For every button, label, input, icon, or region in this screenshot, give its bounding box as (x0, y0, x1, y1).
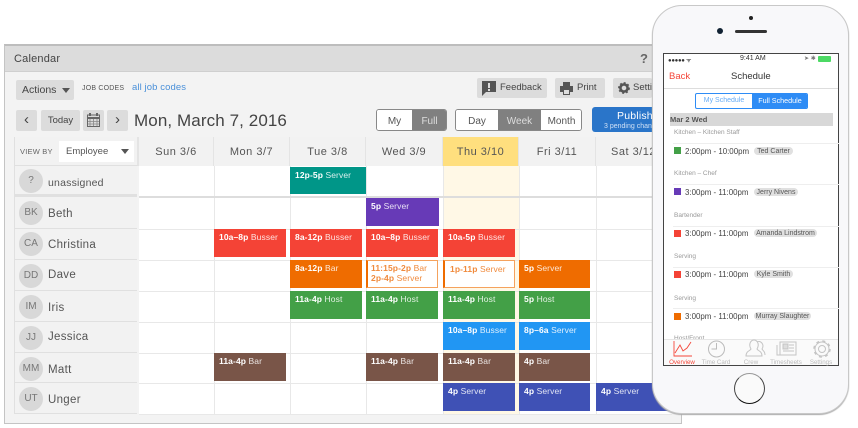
phone screen content: Timesheets (770, 359, 802, 366)
toggle option: week: Week (507, 116, 532, 127)
tab bar (664, 339, 838, 365)
shift: Fri Dave (519, 260, 590, 288)
shift: Fri Unger: 4p Server (524, 386, 562, 396)
header: Wednesday: Wed 3/9 (382, 146, 426, 158)
phone screen content: Kitchen – Chef (674, 170, 717, 176)
job codes label: JOB CODES (82, 85, 124, 92)
icon: printer (560, 82, 573, 95)
row: Matt label: MM (23, 363, 39, 374)
shift: Wed Dave pending: 2p-4p Server (371, 273, 422, 283)
publish button: Publish (617, 110, 653, 122)
phone screen content: Crew (744, 359, 758, 366)
phone screen content: Overview (669, 359, 695, 366)
phone screen content: 3:00pm - 11:00pm (685, 228, 748, 238)
shift: Thu Dave pending: 1p-11p Server (450, 264, 506, 274)
clipped category: Host/Front (674, 335, 704, 342)
next button (107, 110, 128, 131)
today button: Today (48, 115, 73, 126)
shift: Fri Dave: 5p Server (524, 263, 562, 273)
shift: Wed Beth (366, 198, 439, 226)
shift: Sat Unger (596, 383, 672, 411)
icon: calendar (87, 113, 100, 127)
phone screen content: 3:00pm - 11:00pm (685, 312, 748, 320)
toggle option: full: Full (421, 116, 438, 127)
shift: Thu Unger: 4p Server (448, 386, 486, 396)
screen title: Schedule (731, 71, 771, 82)
shift: Fri Matt (519, 353, 590, 381)
shift: Wed Dave pending: 11:15p-2p Bar (371, 263, 427, 273)
status bar: 9:41 AM (740, 55, 766, 62)
row: Matt label (14, 353, 137, 383)
row: Iris label (14, 291, 137, 322)
tab labels (669, 359, 832, 366)
icon: crew (746, 340, 765, 356)
shift: Wed Beth: 5p Server (371, 201, 409, 211)
row: Dave label: Dave (48, 269, 76, 281)
today button (41, 110, 80, 131)
schedule entry 2 (673, 170, 839, 196)
publish button: 3 pending changes (604, 123, 662, 130)
toggle: day, week, month (455, 109, 582, 131)
phone screen content: Ted Carter (757, 148, 790, 155)
row: Iris label: IM (25, 301, 37, 312)
previous button: ‹ (24, 111, 29, 128)
row: Christina label (14, 229, 137, 260)
shift: Mon Christina: 10a–8p Busser (219, 232, 278, 242)
row: Dave label: DD (24, 270, 38, 281)
row: Jessica label: Jessica (48, 331, 88, 343)
row: Christina label: CA (24, 238, 38, 249)
shift: Tue Iris: 11a-4p Host (295, 294, 342, 304)
shift: Tue Dave (290, 260, 362, 288)
actions button (16, 80, 74, 100)
row: Beth label: BK (24, 207, 38, 218)
header: Thursday (today) (443, 137, 519, 166)
shift: Wed Christina (366, 229, 438, 257)
phone (652, 5, 849, 414)
header: Tuesday: Tue 3/8 (307, 146, 348, 158)
toggle option: full (412, 110, 447, 131)
shift: Thu Matt (443, 353, 515, 381)
employee dropdown (59, 141, 134, 162)
shift: Thu Jessica (443, 322, 515, 350)
row: Christina label: Christina (48, 239, 96, 251)
view by control: VIEW BY (20, 147, 53, 156)
view by control (14, 137, 139, 166)
schedule toggle (695, 93, 808, 109)
phone screen (663, 53, 839, 366)
shift: Wed Matt: 11a-4p Bar (371, 356, 414, 366)
status bar: ●●●●● ᯤ (668, 58, 691, 64)
phone screen content: Serving (674, 252, 696, 260)
icon: clock (708, 341, 724, 357)
date band (670, 113, 833, 126)
row: Dave label (14, 260, 137, 291)
toggle: my schedule: My Schedule (704, 97, 744, 104)
header: Monday: Mon 3/7 (230, 146, 273, 158)
shift: Fri Unger (519, 383, 590, 411)
home button (734, 373, 765, 404)
row: Matt label: Matt (48, 364, 72, 376)
shift: Tue Christina: 8a-12p Busser (295, 232, 352, 242)
shift: Thu Dave pending (443, 260, 515, 288)
shift: Fri Matt: 4p Bar (524, 356, 550, 366)
toggle: full schedule (752, 94, 808, 108)
feedback button: Feedback (500, 82, 542, 93)
shift: Thu Jessica: 10a–8p Busser (448, 325, 507, 335)
shift: Wed Iris (366, 291, 438, 319)
grid background (139, 166, 672, 414)
shift: Fri Iris: 5p Host (524, 294, 554, 304)
shift: Fri Iris (519, 291, 590, 319)
tab icons (674, 340, 831, 358)
toggle option: my: My (388, 116, 401, 127)
toggle option: month (541, 110, 582, 131)
phone screen content: Bartender (674, 212, 703, 218)
row: unassigned label: ? (28, 175, 34, 186)
shift: Fri Jessica: 8p–6a Server (524, 325, 577, 335)
row: Beth label: Beth (48, 208, 73, 220)
row: unassigned label: unassigned (48, 177, 104, 189)
shift: Wed Christina: 10a–8p Busser (371, 232, 430, 242)
row: unassigned label (14, 166, 137, 197)
shift: Sat Unger: 4p Server (601, 386, 639, 396)
phone screen content: Kitchen – Kitchen Staff (674, 128, 740, 136)
header: Sunday (139, 137, 214, 166)
phone screen content: Settings (810, 359, 832, 366)
settings button (613, 78, 652, 98)
shift: Thu Iris (443, 291, 515, 319)
phone screen content: 3:00pm - 11:00pm (685, 188, 748, 196)
shift: Mon Matt: 11a-4p Bar (219, 356, 262, 366)
phone screen content: Time Card (702, 359, 730, 366)
header: Thursday (today): Thu 3/10 (457, 146, 504, 158)
phone screen content: Murray Slaughter (756, 313, 809, 320)
print button: Print (577, 82, 597, 93)
shift: Thu Matt: 11a-4p Bar (448, 356, 491, 366)
job codes link: all job codes (132, 82, 186, 93)
shift: Tue unassigned (290, 167, 366, 194)
employee dropdown: Employee (66, 146, 108, 157)
schedule entry 3 (673, 212, 839, 238)
status bar (668, 55, 831, 64)
feedback button (477, 78, 547, 98)
help mark: ? (640, 51, 648, 66)
calendar title bar (5, 46, 681, 72)
shift: Mon Matt (214, 353, 286, 381)
shift: Wed Iris: 11a-4p Host (371, 294, 418, 304)
shift: Tue unassigned: 12p-5p Server (295, 170, 351, 180)
row: Unger label: UT (24, 393, 38, 404)
phone speaker (735, 30, 767, 33)
header: Saturday: Sat 3/12 (611, 146, 656, 158)
date band: Mar 2 Wed (670, 115, 707, 124)
shift: Thu Unger (443, 383, 515, 411)
row: Iris label: Iris (48, 302, 65, 314)
heading: Calendar: Calendar (14, 53, 60, 65)
header: Saturday (596, 137, 672, 166)
header: Sunday: Sun 3/6 (155, 146, 197, 158)
shift: Tue Iris (290, 291, 362, 319)
print button (555, 78, 605, 98)
shift: Wed Matt (366, 353, 438, 381)
icon: gear (618, 82, 630, 94)
shift: Tue Christina (290, 229, 362, 257)
phone camera (717, 28, 723, 34)
back link: Back (669, 71, 690, 82)
header: Friday: Fri 3/11 (537, 146, 577, 158)
phone screen content: Kyle Smith (757, 271, 790, 278)
status bar: ➤ ✱ (804, 56, 816, 62)
shift: Tue Dave: 8a-12p Bar (295, 263, 339, 273)
toggle option: my (377, 110, 412, 131)
nav bar (664, 65, 838, 89)
shift: Thu Christina: 10a-5p Busser (448, 232, 505, 242)
icon: timesheets (777, 342, 796, 355)
shift: Mon Christina (214, 229, 286, 257)
toggle option: day: Day (468, 116, 486, 127)
row: Beth label (14, 197, 137, 229)
phone screen content: 2:00pm - 10:00pm (685, 146, 749, 156)
date navigation (16, 110, 287, 131)
toolbar: actions and job codes (16, 80, 186, 100)
icon: settings (814, 341, 830, 357)
shift: Wed Dave pending (366, 260, 438, 288)
phone screen content: Jerry Nivens (757, 189, 795, 196)
schedule entry 1 (673, 128, 839, 156)
toggle: full schedule: Full Schedule (758, 96, 802, 105)
toggle option: week (498, 110, 541, 131)
toggle option: day (456, 110, 498, 131)
toggle option: month: Month (548, 116, 575, 127)
panel: calendar window (4, 44, 682, 424)
next button: › (115, 111, 120, 128)
phone screen content: Amanda Lindstrom (756, 230, 815, 237)
header: Monday (214, 137, 290, 166)
header: Tuesday (290, 137, 366, 166)
today column highlight (443, 166, 519, 414)
toolbar: feedback, print, settings (477, 78, 652, 98)
header: Friday (519, 137, 596, 166)
icon: battery (818, 56, 831, 62)
row: Unger label (14, 383, 137, 414)
publish button (592, 107, 662, 132)
schedule entry 5 (673, 294, 839, 320)
header: Wednesday (366, 137, 443, 166)
phone screen content: 3:00pm - 11:00pm (685, 270, 748, 278)
actions button: Actions (22, 84, 56, 96)
icon: overview chart (674, 341, 692, 356)
schedule entry 4 (673, 252, 839, 278)
previous button (16, 110, 37, 131)
row: Jessica label: JJ (26, 332, 36, 343)
column headers (155, 137, 656, 166)
phone sensor dot (749, 16, 753, 20)
calendar picker button (83, 110, 104, 131)
shift: Thu Christina (443, 229, 515, 257)
shift: Fri Jessica (519, 322, 590, 350)
row: Unger label: Unger (48, 394, 81, 406)
icon: speech bubble (482, 81, 496, 96)
shift: Thu Iris: 11a-4p Host (448, 294, 495, 304)
date heading: Mon, March 7, 2016 (134, 111, 287, 130)
row: Jessica label (14, 322, 137, 353)
phone screen content: Serving (674, 294, 696, 302)
toggle: my or full (376, 109, 447, 131)
